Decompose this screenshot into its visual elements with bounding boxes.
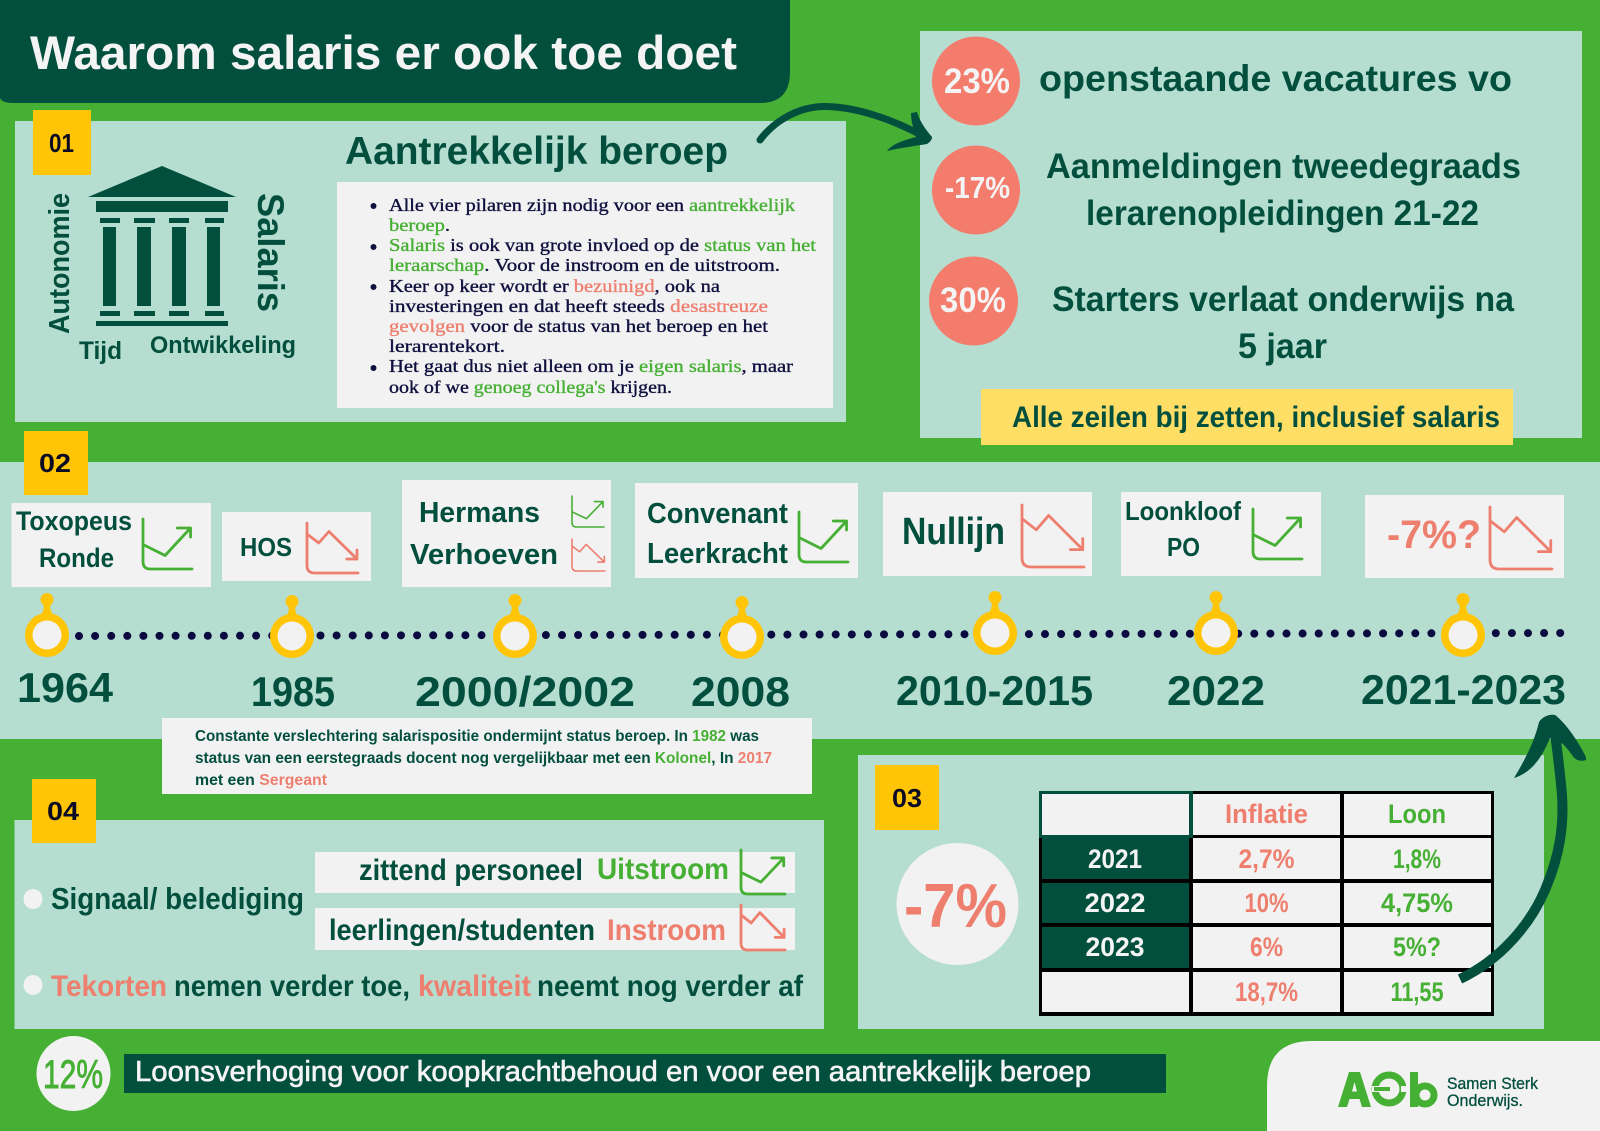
text block: bullet list: Alle vier pilaren zijn nodig voor een aantrekkelijk: [389, 195, 795, 215]
stat -17%: -17%: [945, 170, 1010, 205]
label: Salaris: Salaris: [250, 193, 291, 312]
badge 02: [24, 431, 88, 495]
year labels: 2010-2015: [896, 667, 1093, 714]
stat 23%: 23%: [944, 62, 1010, 101]
stat 23%: [932, 36, 1020, 126]
card: Hermans Verhoeven: Verhoeven: [410, 539, 558, 571]
text: starters verlaat onderwijs: [1052, 280, 1515, 366]
marker 1985: [270, 595, 314, 658]
heading: Aantrekkelijk beroep: Aantrekkelijk beroep: [345, 130, 728, 173]
bar: zittend personeel uitstroom: [315, 850, 795, 894]
card: Toxopeus Ronde: Ronde: [39, 543, 114, 573]
card: Toxopeus Ronde: Toxopeus: [16, 506, 132, 536]
arrow: curved arrow to statistics: [760, 106, 932, 151]
panel 01: aantrekkelijk beroep: [15, 110, 846, 422]
bar: leerlingen/studenten instroom: Instroom: [607, 914, 726, 947]
panel 04: signaal: [14, 779, 824, 1029]
icon: chart down: [741, 905, 785, 950]
panel 03: inflatie tabel: [858, 755, 1544, 1029]
stat circle -7%: [896, 843, 1018, 965]
arrow: large curved arrow from table to timeline: [1460, 715, 1586, 979]
card: Convenant Leerkracht: Convenant: [647, 498, 788, 530]
logo: AOb mark: [1338, 1072, 1434, 1107]
marker 2008: [720, 596, 764, 659]
card: HOS: HOS: [240, 532, 292, 562]
panel 02: timeline band: [0, 431, 1600, 739]
badge 02: 02: [39, 448, 71, 478]
text block: bullet list: lerarentekort.: [389, 336, 505, 356]
marker 2010-2015: [973, 591, 1017, 655]
title banner: [0, 0, 790, 103]
table: 2023: [1086, 932, 1144, 962]
badge 04: 04: [47, 796, 80, 826]
bullet: tekorten: [24, 970, 804, 1003]
card: HOS: [222, 512, 371, 581]
badge 01: [33, 110, 91, 175]
table: 2,7%: [1238, 844, 1294, 874]
card: Convenant Leerkracht: Leerkracht: [647, 538, 788, 570]
text block: bullet list: investeringen en dat heeft steeds desastreuze: [389, 296, 768, 316]
stat 30%: [929, 256, 1018, 346]
card: Loonkloof PO: PO: [1167, 532, 1200, 562]
card: Loonkloof PO: [1121, 492, 1321, 576]
bullet: tekorten: Tekorten: [51, 970, 167, 1003]
text block: bullet list: leraarschap . Voor de instroom en de uitstroom.: [389, 255, 780, 275]
table: Loon: [1388, 799, 1446, 829]
callout: alle zeilen bij zetten: [981, 389, 1513, 445]
table: 10%: [1244, 888, 1288, 918]
text block: bullet list: [337, 182, 833, 408]
card: Nullijn: [883, 492, 1092, 576]
card: Convenant Leerkracht: [635, 483, 858, 578]
banner: loonsverhoging: Loonsverhoging voor koopkrachtbehoud en voor een aantrekkelijk beroep: [135, 1056, 1091, 1088]
logo tagline: [1447, 1074, 1538, 1110]
bar: leerlingen/studenten instroom: leerlingen/studenten: [329, 914, 595, 947]
logo panel: AOb: [1267, 1041, 1600, 1131]
year labels: 1985: [251, 668, 335, 715]
text block: bullet list: Het gaat dus niet alleen om je eigen salaris , maar: [389, 356, 793, 376]
bullet: tekorten: neemt nog verder af: [537, 970, 804, 1003]
year labels: 1964: [17, 664, 114, 711]
callout: salarispositie note: met een Sergeant: [195, 772, 328, 789]
table: 11,55: [1390, 977, 1444, 1007]
icon: chart up: [799, 512, 848, 562]
card: Hermans Verhoeven: [402, 480, 611, 587]
panel: statistieken: [920, 31, 1582, 445]
callout: salarispositie note: status van een eerstegraads docent nog vergelijkbaar met een Kolonel, In 2017: [195, 750, 772, 767]
table: 6%: [1250, 932, 1283, 962]
text: aanmeldingen tweedegraads: Aanmeldingen tweedegraads: [1046, 147, 1521, 186]
card: -7%?: -7%?: [1387, 513, 1481, 557]
timeline dots: [79, 633, 1564, 636]
table: 5%?: [1393, 932, 1441, 962]
table: Inflatie: [1225, 799, 1308, 829]
table: 2022: [1084, 888, 1146, 918]
text block: bullet list: beroep .: [389, 215, 450, 235]
icon: chart up: [741, 850, 785, 894]
table: 18,7%: [1235, 977, 1298, 1007]
icon: small chart down: [572, 539, 605, 571]
text: openstaande vacatures vo: openstaande vacatures vo: [1039, 58, 1512, 99]
text block: bullet list: Keer op keer wordt er bezuinigd , ook na: [389, 276, 720, 296]
icon: chart down: [1490, 507, 1552, 569]
text block: bullet list: ook of we genoeg collega's krijgen.: [389, 377, 672, 397]
icon: chart up: [143, 519, 192, 569]
icon: chart up: [1253, 509, 1302, 559]
logo tagline: Onderwijs.: [1447, 1091, 1523, 1110]
marker 2022: [1194, 591, 1238, 655]
badge 04: [32, 779, 96, 843]
table: 4,75%: [1381, 888, 1453, 918]
card: Hermans Verhoeven: Hermans: [419, 497, 540, 529]
label: Ontwikkeling: Ontwikkeling: [150, 332, 296, 359]
bullet: tekorten: kwaliteit: [418, 970, 531, 1003]
circle: 12%: [36, 1036, 110, 1111]
bullet: tekorten: nemen verder toe,: [174, 970, 410, 1003]
stat 30%: 30%: [940, 281, 1006, 320]
card: Loonkloof PO: Loonkloof: [1125, 496, 1241, 526]
table: 1,8%: [1393, 844, 1441, 874]
text block: bullet list: gevolgen voor de status van het beroep en het: [389, 316, 768, 336]
text block: bullet list: Salaris is ook van grote invloed op de status van het: [389, 235, 816, 255]
year labels: [17, 664, 1566, 715]
callout: salarispositie note: [162, 718, 812, 794]
marker 2000/2002: [493, 594, 537, 658]
table: 2021: [1088, 844, 1142, 874]
title banner: Waarom salaris er ook toe doet: [30, 26, 737, 79]
logo tagline: Samen Sterk: [1447, 1074, 1538, 1093]
badge 03: [875, 765, 939, 830]
circle: 12%: 12%: [43, 1053, 103, 1097]
table: [1039, 791, 1494, 1016]
bar: leerlingen/studenten instroom: [315, 905, 795, 950]
label: Autonomie: Autonomie: [44, 193, 76, 334]
bullet: Signaal/ belediging: Signaal/ belediging: [51, 881, 304, 916]
text: aanmeldingen tweedegraads: [1046, 147, 1521, 233]
icon: small chart up: [572, 496, 604, 527]
icon: chart down: [1022, 505, 1084, 567]
year labels: 2021-2023: [1361, 666, 1566, 713]
marker 2021-2023: [1441, 593, 1485, 657]
callout: salarispositie note: Constante verslechtering salarispositie ondermijnt status beroep. In 1982 was: [195, 728, 759, 745]
stat -17%: [932, 146, 1020, 234]
icon: temple with pillars: [88, 166, 236, 326]
bar: zittend personeel uitstroom: zittend personeel: [359, 854, 583, 887]
text: starters verlaat onderwijs: Starters verlaat onderwijs na: [1052, 280, 1515, 319]
bar: zittend personeel uitstroom: Uitstroom: [597, 853, 729, 886]
year labels: 2000/2002: [415, 668, 635, 715]
marker 1964: [25, 593, 69, 657]
card: Nullijn: Nullijn: [902, 511, 1005, 553]
stat circle -7%: -7%: [904, 872, 1007, 941]
callout: alle zeilen bij zetten: Alle zeilen bij zetten, inclusief salaris: [1012, 401, 1500, 434]
card: Toxopeus Ronde: [12, 503, 211, 587]
badge 03: 03: [892, 783, 922, 813]
icon: chart down: [307, 523, 358, 573]
card: -7%?: [1365, 495, 1564, 578]
label: Tijd: Tijd: [79, 337, 122, 365]
year labels: 2008: [691, 668, 790, 715]
year labels: 2022: [1167, 667, 1265, 714]
badge 01: 01: [49, 128, 74, 158]
text: aanmeldingen tweedegraads: lerarenopleidingen 21-22: [1086, 194, 1479, 233]
text: starters verlaat onderwijs: 5 jaar: [1238, 327, 1327, 366]
